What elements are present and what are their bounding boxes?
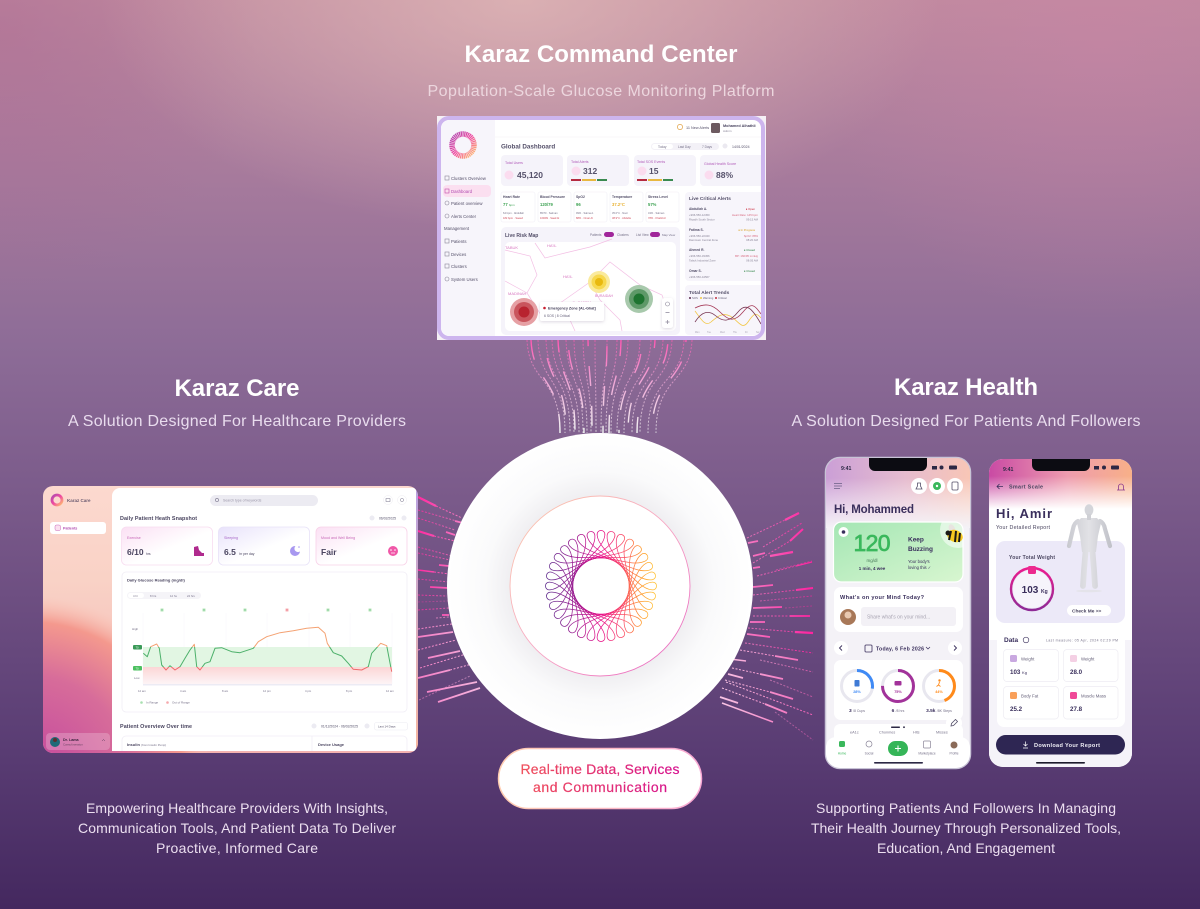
- card: exercise: 6/10 hrs: [127, 547, 151, 557]
- icon: bee: [940, 522, 963, 548]
- card: total weight: Kg: [1041, 589, 1048, 595]
- chart: daily glucose: Daily Glucose Reading (mg/dl): [127, 578, 185, 582]
- sidebar: Devices: [451, 252, 466, 257]
- vitals cards: [501, 192, 679, 222]
- live critical alerts: Abdullah A.: [689, 207, 707, 211]
- central hub: [447, 433, 753, 739]
- glucose card: loving this ✓: [908, 565, 931, 570]
- home indicator: [1036, 762, 1085, 764]
- stat cards: 45,120: [517, 170, 543, 180]
- date selector: [834, 641, 962, 655]
- vitals cards: 182 bpm · Saeed: [503, 216, 523, 220]
- ring: sleep: 6 /8 hrs: [892, 708, 905, 714]
- search bar: Search type of keywords: [223, 498, 262, 502]
- live critical alerts: Omar S.: [689, 269, 702, 273]
- vitals cards: Temperature: [612, 195, 632, 199]
- phone: Karaz Health report: [989, 452, 1132, 767]
- vitals cards: 37.2°C: [612, 202, 625, 207]
- date tabs: Last Day: [678, 145, 691, 149]
- risk zone: red: [510, 298, 538, 326]
- stat cards: Global Health Score: [704, 162, 736, 166]
- live risk map: BURAIDAH: [595, 294, 614, 298]
- live risk map: Patients: [590, 233, 602, 237]
- glucose card: 1 min, 4 wee: [859, 566, 886, 571]
- card: data: [997, 623, 1125, 727]
- status bar: 9:41: [841, 466, 851, 472]
- vitals cards: Stress Level: [648, 195, 668, 199]
- ring: sleep: [882, 670, 914, 714]
- chart: daily glucose: In Range: [146, 700, 159, 704]
- sidebar: Management: [444, 226, 470, 231]
- date nav: [370, 516, 406, 520]
- card: mind: Share what's on your mind...: [867, 614, 930, 620]
- sidebar: Patients: [63, 526, 77, 530]
- map tooltip: Emergency Zone [AL-Ghat]: [548, 306, 597, 310]
- button: download report: [996, 735, 1125, 754]
- chart: daily glucose: Out of Range: [172, 700, 190, 704]
- description: Karaz Health: Their Health Journey Through Personalized Tools,: [811, 820, 1121, 836]
- sidebar: System Users: [451, 277, 478, 282]
- chart: daily glucose: 4 hr: [133, 594, 138, 598]
- card: daily rings: [834, 660, 963, 720]
- chart: daily glucose: 12 hs: [170, 594, 177, 598]
- sidebar: Patients: [451, 239, 467, 244]
- risk zone: yellow: [588, 271, 610, 293]
- total alert trends: Tue: [707, 332, 712, 334]
- data streams: top: [527, 340, 692, 433]
- stat cards: Total Alerts: [571, 160, 589, 164]
- top bar: [677, 123, 756, 133]
- inner ring: [510, 496, 690, 676]
- data streams: right: [720, 513, 813, 740]
- stat cards: 88%: [716, 170, 733, 180]
- tab bar: [826, 737, 970, 768]
- title: Karaz Care: Karaz Care: [174, 375, 300, 402]
- search bar: [210, 495, 406, 506]
- user card: [46, 733, 110, 750]
- vitals cards: 99% · Salma A.: [576, 211, 594, 215]
- chart: daily glucose: 8 hrs: [150, 594, 157, 598]
- nav bar: [997, 484, 1125, 490]
- card: data: 103 Kg: [1010, 669, 1027, 676]
- ring: water: [842, 670, 872, 714]
- card: sleeping: Sleeping: [224, 536, 238, 540]
- title: Karaz Health: Karaz Health: [894, 374, 1038, 401]
- total alert trends: Total Alert Trends: [689, 290, 730, 296]
- live risk map: Live Risk Map: [505, 233, 538, 239]
- header icons: [911, 478, 963, 494]
- glucose card: Keep: [908, 536, 924, 544]
- card: data: 25.2: [1010, 706, 1023, 713]
- sidebar: Clusters: [451, 264, 467, 269]
- card: health stats: Misses: [936, 730, 948, 734]
- header gradient: [826, 458, 970, 528]
- live critical alerts: +966-550-22340: [689, 234, 710, 238]
- card: data: Data: [1004, 637, 1018, 644]
- card: total weight: Your Total Weight: [1009, 555, 1055, 561]
- greeting: Hi, Mohammed: [834, 504, 914, 516]
- description: Karaz Health: [811, 800, 1121, 856]
- vitals cards: Heart Rate: [503, 195, 520, 199]
- tab bar: Home: [838, 752, 846, 756]
- card: total weight: Check Me >>: [1072, 608, 1102, 614]
- card: mood: [316, 527, 407, 565]
- total alert trends: Wed: [720, 332, 725, 334]
- chart: daily glucose: Low: [134, 676, 140, 680]
- card: health stats: [834, 724, 963, 744]
- live critical alerts: ● Open: [746, 207, 755, 211]
- stat cards: 15: [649, 166, 659, 176]
- vitals cards: 88% · Omar Al: [576, 216, 593, 220]
- live risk map: [501, 227, 680, 335]
- live critical alerts: +966-550-33456: [689, 254, 710, 258]
- stat cards: 312: [583, 166, 597, 176]
- date nav: 06/02/2025: [379, 516, 396, 520]
- card: health stats: Chonmes: [879, 730, 895, 734]
- chart: daily glucose: 4 pm: [305, 689, 312, 693]
- card: insulin and device usage: Device Usage: [318, 742, 345, 747]
- vitals cards: 96: [576, 202, 581, 207]
- total alert trends: Sat: [756, 331, 760, 334]
- sidebar: Karaz Care: [67, 498, 91, 503]
- card: health stats: eA1c: [850, 730, 859, 734]
- live risk map: HA'IL: [547, 243, 557, 248]
- map tooltip: 6 SOS | 8 Critical: [544, 314, 570, 318]
- heading: snapshot: Daily Patient Heath Snapshot: [120, 516, 197, 522]
- sidebar: [43, 486, 418, 753]
- live critical alerts: SpO2: 88%: [744, 234, 759, 238]
- live critical alerts: +966-550-44567: [689, 275, 710, 279]
- chart: daily glucose: 8 pm: [346, 689, 353, 693]
- date tabs: 7 Days: [702, 145, 712, 149]
- live critical alerts: Heart Rate: 145 bpm: [732, 213, 759, 217]
- total alert trends: Critical: [718, 296, 727, 300]
- card: exercise: Exercise: [127, 536, 141, 540]
- status bar: 9:41: [1003, 467, 1013, 473]
- live critical alerts: +966-550-12450: [689, 213, 710, 217]
- ring: water: 3 /8 Cups: [849, 708, 865, 714]
- ring: water: 28%: [853, 690, 861, 694]
- total alert trends: Warning: [703, 296, 714, 300]
- sidebar: Clusters Overview: [451, 176, 487, 181]
- chart: daily glucose: 70: [136, 666, 139, 670]
- date selector: Today, 6 Feb 2026: [876, 646, 924, 652]
- chart: daily glucose: 12 am: [138, 689, 146, 693]
- sidebar: [441, 120, 495, 336]
- chart: daily glucose: 12 pm: [263, 689, 271, 693]
- card: exercise: [122, 527, 212, 565]
- live critical alerts: Tabuk Industrial Zone: [689, 258, 716, 262]
- live critical alerts: ● In Progress: [738, 228, 756, 232]
- live risk map: HA'IL: [563, 274, 573, 279]
- card: mood: Mood and Well Being: [321, 536, 355, 540]
- card: data: Last measure: 05 Apr, 2024 02:29 PM: [1046, 638, 1118, 642]
- vitals cards: 38.9°C · Abdulla: [612, 216, 631, 220]
- card: data: Weight: [1081, 656, 1095, 662]
- vitals cards: 35.0°C · Noor: [612, 211, 628, 215]
- vitals cards: 57%: [648, 202, 657, 207]
- risk zone: green: [625, 285, 653, 313]
- chart: daily glucose: 24 hrs: [187, 594, 195, 598]
- live critical alerts: Ahmed R.: [689, 248, 704, 252]
- card: data: Body Fat: [1021, 694, 1039, 698]
- ring: steps: 44%: [935, 690, 943, 694]
- callout: real-time data: [498, 748, 702, 808]
- vitals cards: 85/70 · Salman: [540, 211, 558, 215]
- ring: steps: [924, 670, 954, 714]
- hamburger menu: [834, 484, 842, 488]
- user card: Dr. Lama: [63, 738, 80, 742]
- card: mind: What's on your Mind Today?: [840, 595, 925, 601]
- card: insulin and device usage: [122, 736, 408, 751]
- live critical alerts: BP: 160/95 mmHg: [735, 254, 758, 258]
- panel: command center dashboard: [437, 116, 766, 340]
- glucose card: 120: [854, 530, 890, 556]
- description: Karaz Care: [78, 800, 396, 856]
- total alert trends: Mon: [695, 332, 700, 334]
- nav bar: Smart Scale: [1009, 484, 1043, 490]
- tab bar: Social: [865, 752, 874, 756]
- subtitle: command center: Population-Scale Glucose Monitoring Platform: [428, 83, 774, 100]
- vitals cards: Blood Pressure: [540, 195, 565, 199]
- map controls: [662, 298, 673, 328]
- ring: sleep: 75%: [894, 690, 902, 694]
- tab bar: Marketplace: [918, 752, 936, 756]
- total alert trends: Thu: [733, 332, 738, 334]
- card: data: 27.8: [1070, 706, 1083, 713]
- live critical alerts: [685, 192, 765, 281]
- total alert trends: [685, 285, 765, 335]
- status bar: [1003, 466, 1119, 473]
- card: insulin and device usage: Insulin (from Insulin Pump): [127, 742, 166, 747]
- live risk map: List View: [636, 233, 649, 237]
- glucose card: Your body's: [908, 559, 930, 564]
- vitals cards: 77 bpm: [503, 202, 515, 207]
- phone: Karaz Health home: [826, 450, 976, 768]
- live critical alerts: Fatima S.: [689, 228, 704, 232]
- top bar: Admin: [723, 129, 732, 133]
- total alert trends: SOS: [692, 296, 698, 300]
- greeting: Hi, Amir: [996, 506, 1052, 521]
- description: Karaz Care: Proactive, Informed Care: [156, 840, 318, 856]
- heading: patient overview: Patient Overview Over time: [120, 724, 192, 730]
- chart: daily glucose: [122, 572, 407, 712]
- vitals cards: SpO2: [576, 195, 585, 199]
- card: data: Muscle Mass: [1081, 694, 1106, 698]
- range controls: 01/12/2024 - 06/02/2025: [321, 724, 358, 728]
- panel: Karaz Care dashboard: [43, 486, 418, 766]
- tab bar: Profile: [949, 752, 959, 756]
- live risk map: MADINAH: [508, 291, 527, 296]
- header gradient: [989, 459, 1132, 767]
- stat cards: Total SOS Events: [637, 160, 665, 164]
- subtitle: Your Detailed Report: [996, 525, 1051, 531]
- card: data: Weight: [1021, 656, 1035, 662]
- live risk map: Map View: [662, 233, 676, 237]
- range controls: [312, 722, 408, 730]
- description: Karaz Care: Empowering Healthcare Providers With Insights,: [86, 800, 388, 816]
- live critical alerts: ● Closed: [744, 269, 755, 273]
- description: Karaz Health: Supporting Patients And Followers In Managing: [816, 800, 1116, 816]
- sidebar: Alerts Center: [451, 214, 477, 219]
- live critical alerts: 09:15 AM: [746, 218, 759, 222]
- card: data: 28.0: [1070, 669, 1083, 676]
- glucose card: Buzzing: [908, 546, 933, 553]
- chart: daily glucose: 4 am: [180, 689, 187, 693]
- sidebar: Patient overview: [451, 201, 483, 206]
- card: total weight: 103: [1022, 585, 1039, 596]
- live risk map: Clusters: [617, 233, 629, 237]
- glucose card: [833, 522, 964, 582]
- subtitle: Karaz Health: A Solution Designed For Patients And Followers: [792, 413, 1140, 430]
- edit button: [946, 715, 962, 731]
- live critical alerts: 08:05 AM: [746, 258, 759, 262]
- date tabs: 14/01/2024: [732, 145, 750, 149]
- live risk map: AL-QASSIM: [572, 301, 591, 305]
- date tabs: [651, 143, 750, 150]
- top bar: 11 New Alerts: [686, 126, 709, 130]
- notch: [1032, 452, 1090, 471]
- vitals cards: 64 bpm · Abdullah: [503, 211, 524, 215]
- description: Karaz Care: Communication Tools, And Patient Data To Deliver: [78, 820, 396, 836]
- map tooltip: [540, 302, 604, 321]
- total alert trends: Fri: [745, 331, 748, 334]
- top bar: Mohamed Alhathli: [723, 124, 756, 128]
- live risk map: TABUK: [505, 245, 518, 250]
- callout: real-time data: and Communication: [533, 779, 667, 795]
- chart: daily glucose: 12 am: [386, 689, 394, 693]
- card: mood: Fair: [321, 547, 337, 557]
- callout: real-time data: Real-time Data, Services: [520, 761, 680, 777]
- vitals cards: 120/79: [540, 202, 553, 207]
- card: sleeping: 6.5 hr per day: [224, 547, 255, 557]
- main panel: [112, 488, 416, 766]
- notch: [869, 458, 927, 471]
- card: total weight: [996, 541, 1125, 623]
- stat cards: Total Users: [505, 161, 523, 165]
- ring: steps: 3.5k /8K Steps: [926, 708, 952, 714]
- date tabs: Today: [658, 145, 667, 149]
- glucose card: mg/dl: [866, 558, 878, 563]
- icon: body figure: [1069, 504, 1110, 592]
- description: Karaz Health: Education, And Engagement: [877, 840, 1055, 856]
- chart: daily glucose: High: [132, 627, 139, 631]
- spirograph logo: [545, 530, 657, 642]
- user card: Consult session: [63, 742, 83, 746]
- vitals cards: 160/99 · Saad Al: [540, 216, 560, 220]
- stat cards: [501, 155, 766, 186]
- live critical alerts: Dammam Central Zone: [689, 238, 719, 242]
- live critical alerts: 08:20 AM: [746, 238, 759, 242]
- live critical alerts: ● Closed: [744, 248, 755, 252]
- live critical alerts: Riyadh South Sector: [689, 218, 715, 222]
- card: health stats: Hits: [913, 730, 920, 734]
- chart: daily glucose: 70: [136, 646, 139, 650]
- subtitle: Karaz Care: A Solution Designed For Healthcare Providers: [68, 413, 406, 430]
- title: Karaz Command Center: Karaz Command Center: [464, 41, 738, 68]
- sidebar: Dashboard: [451, 189, 473, 194]
- data streams: left: [418, 497, 480, 702]
- live critical alerts: Live Critical Alerts: [689, 196, 731, 202]
- outer white disc: [447, 433, 753, 739]
- chart: daily glucose: 8 am: [222, 689, 229, 693]
- card: mind: [834, 587, 963, 632]
- vitals cards: 78% · Khalid Al: [648, 216, 666, 220]
- status bar: [841, 466, 957, 470]
- button: download report: Download Your Report: [1034, 743, 1100, 749]
- vitals cards: 43% · Salman: [648, 211, 665, 215]
- heading: Global Dashboard: [501, 144, 555, 150]
- range controls: Last 14 Days: [378, 724, 396, 728]
- card: sleeping: [218, 527, 310, 565]
